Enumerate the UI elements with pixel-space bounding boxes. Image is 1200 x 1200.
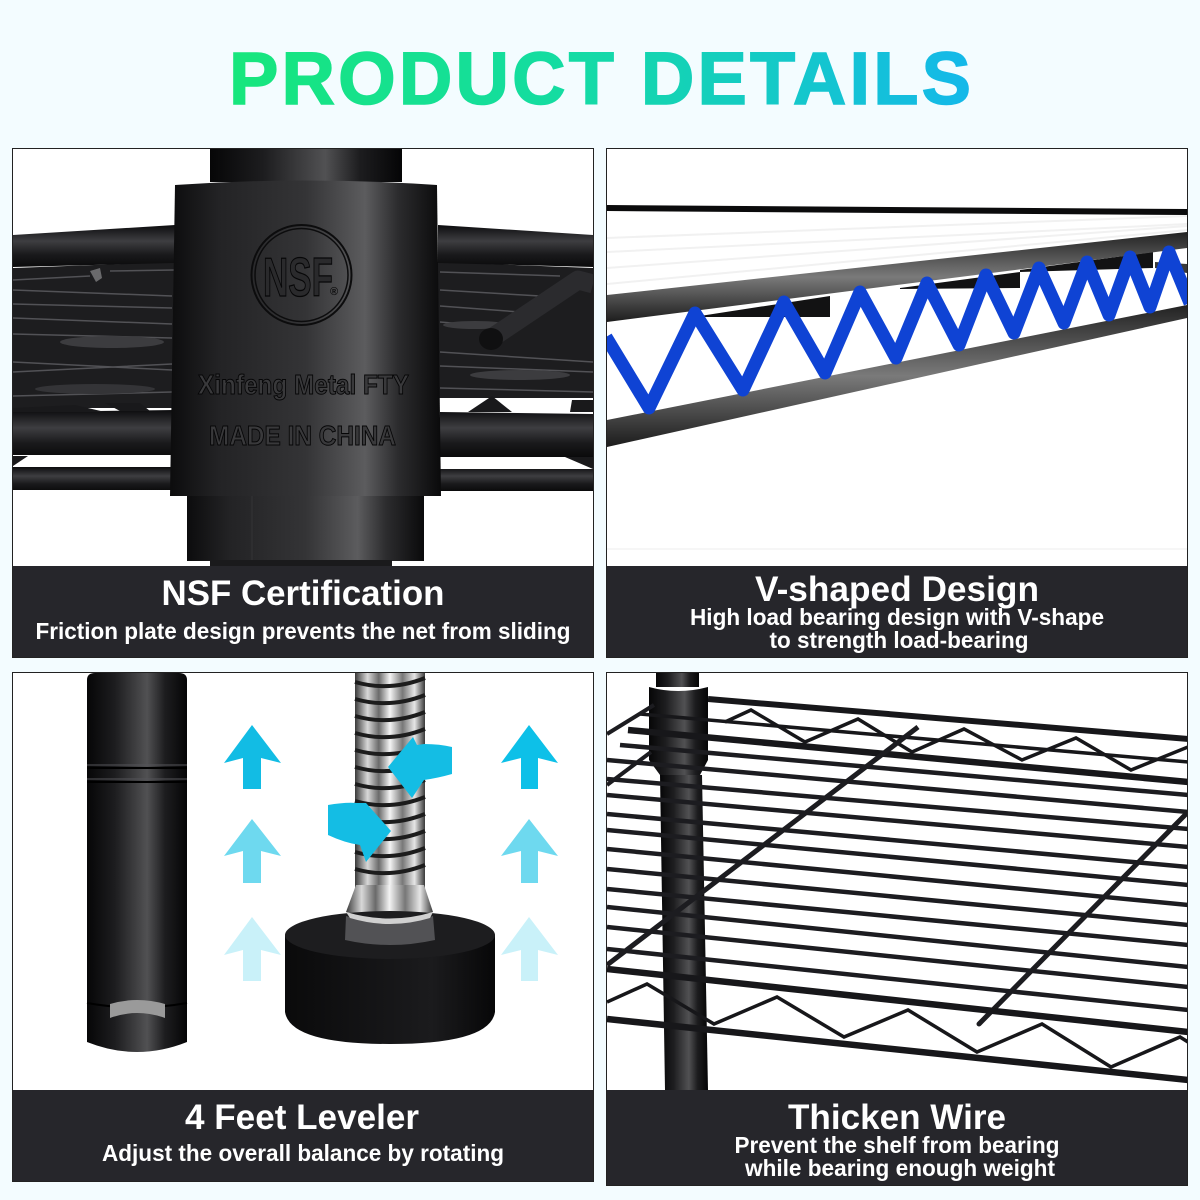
caption bar: [13, 566, 593, 657]
panel: V-shaped design: [606, 148, 1190, 658]
caption text: Adjust the overall balance by rotating: [102, 1140, 504, 1166]
panel: NSF certification: [12, 148, 594, 658]
caption heading: NSF Certification: [162, 574, 444, 613]
NSF mark: NSF: [263, 246, 333, 308]
caption heading: Thicken Wire: [788, 1098, 1006, 1137]
caption line 1: High load bearing design with V-shape: [690, 604, 1104, 630]
caption line 2: while bearing enough weight: [744, 1155, 1055, 1181]
embossed origin text: MADE IN CHINA: [209, 420, 396, 451]
caption bar: [607, 566, 1187, 657]
caption heading: 4 Feet Leveler: [185, 1098, 419, 1137]
photo: wire shelf: [607, 673, 1188, 1090]
icon: leveling foot: [285, 911, 495, 1044]
NSF mark: [252, 225, 352, 325]
caption line 1: Prevent the shelf from bearing: [734, 1132, 1060, 1158]
caption bar: [13, 1090, 593, 1181]
title: PRODUCT DETAILS: [229, 37, 971, 120]
caption heading: V-shaped Design: [755, 570, 1039, 609]
icon: rotation arrows: [328, 737, 452, 862]
icon: shelf post: [87, 673, 187, 1052]
caption bar: [607, 1090, 1187, 1185]
icon: up arrows left: [224, 725, 281, 981]
caption line 2: to strength load-bearing: [770, 627, 1028, 653]
panel: 4 feet leveler: [12, 672, 594, 1182]
panel: thicken wire: [606, 672, 1188, 1186]
NSF mark: ®: [330, 286, 338, 298]
photo: V-shaped wire: [606, 208, 1190, 549]
icon: threaded screw: [346, 673, 433, 918]
embossed maker text: Xinfeng Metal FTY: [198, 369, 409, 400]
icon: up arrows right: [501, 725, 558, 981]
photo: wire shelf and NSF sleeve: [13, 149, 593, 566]
caption text: Friction plate design prevents the net from sliding: [36, 618, 570, 644]
